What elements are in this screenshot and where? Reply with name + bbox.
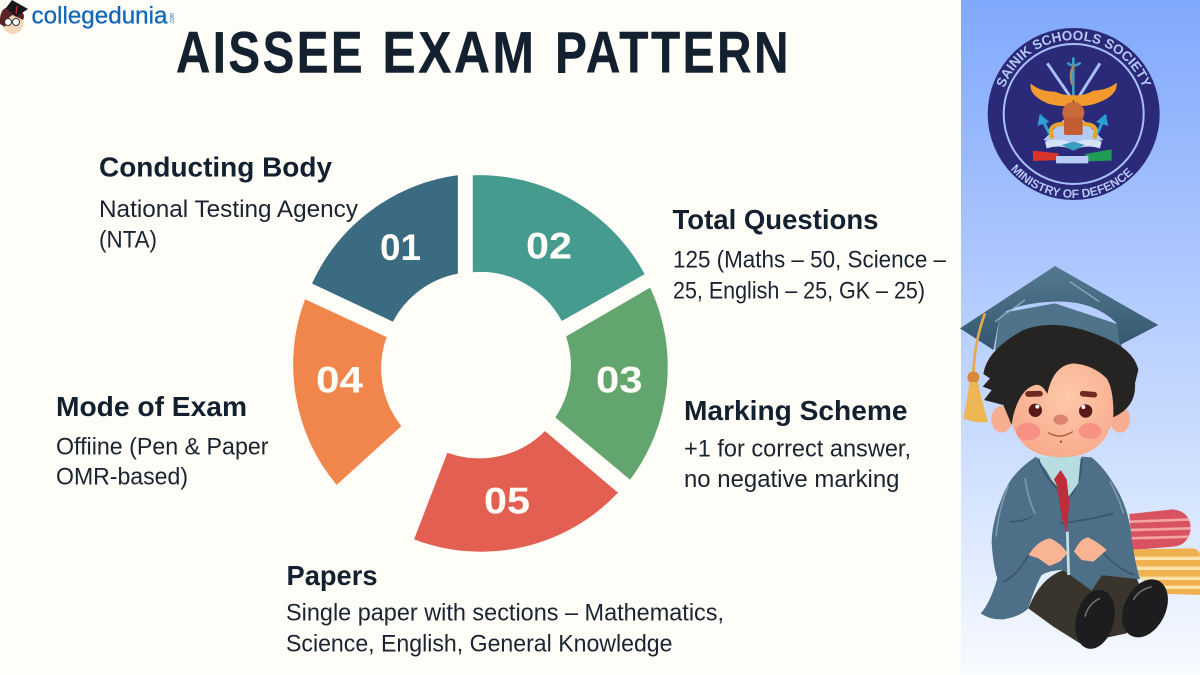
emblem: Sainik Schools Society crest (988, 28, 1160, 200)
hair (983, 325, 1138, 425)
text block: total questions: Total Questions (672, 204, 878, 235)
shoes (1069, 572, 1177, 653)
text block: marking scheme (684, 395, 911, 493)
illustration: graduate boy with books (960, 266, 1200, 653)
segment 02: 02 (526, 226, 572, 266)
eyebrows and eyes (1028, 394, 1094, 418)
text block: mode of exam (56, 391, 268, 490)
text block: marking scheme: no negative marking (684, 466, 900, 493)
text block: marking scheme: Marking Scheme (684, 395, 908, 426)
logo: collegedunia (0, 0, 176, 34)
text block: conducting body: National Testing Agency (99, 196, 358, 223)
panel: right blue gradient (961, 0, 1200, 675)
segment 05 (415, 432, 617, 551)
segment 04: 04 (316, 360, 363, 400)
segment 01 (313, 176, 457, 321)
text block: total questions: 25, English – 25, GK – 25) (673, 278, 925, 304)
crest text: bottom arc: MINISTRY OF DEFENCE (1011, 164, 1133, 198)
text block: papers: Science, English, General Knowledge (286, 630, 672, 658)
text block: mode of exam: OMR-based) (56, 464, 188, 490)
text block: total questions: 125 (Maths – 50, Science – (673, 246, 947, 274)
icon: student head with cap (0, 0, 28, 34)
ears (991, 406, 1012, 433)
face (1010, 357, 1114, 457)
text block: conducting body: Conducting Body (99, 152, 332, 182)
crest artwork: lances, anchor, eagle and lion capital (1030, 57, 1117, 163)
gown (981, 457, 1140, 619)
text block: papers: Papers (286, 560, 378, 591)
text block: papers: Single paper with sections – Mathematics, (286, 600, 724, 626)
donut chart: five numbered segments (294, 176, 667, 551)
tie (1054, 470, 1069, 532)
text block: papers (286, 560, 724, 658)
segment 05: 05 (484, 480, 530, 522)
text block: mode of exam: Mode of Exam (56, 391, 247, 422)
title: AISSEE (176, 20, 365, 86)
books (1129, 509, 1200, 595)
title: PATTERN (555, 20, 791, 86)
graduation cap (960, 266, 1158, 350)
crest text: top arc: SAINIK SCHOOLS SOCIETY (996, 30, 1152, 87)
trousers (1028, 570, 1142, 643)
segment 01: 01 (380, 227, 421, 268)
text block: conducting body: (NTA) (99, 226, 157, 254)
text block: conducting body (99, 152, 358, 254)
shirt placket (1067, 532, 1069, 575)
segment 03 (556, 288, 667, 479)
right ear (1110, 406, 1130, 433)
logo wordmark: collegedunia (32, 2, 168, 30)
segment 03: 03 (596, 360, 642, 400)
shirt collar (1038, 457, 1081, 498)
tassel (963, 313, 988, 422)
segment 02 (473, 176, 644, 320)
title (176, 20, 791, 86)
text block: total questions (672, 204, 947, 304)
text block: marking scheme: +1 for correct answer, (684, 436, 911, 462)
text block: mode of exam: Offiine (Pen & Paper (56, 434, 268, 460)
title: EXAM (382, 20, 536, 86)
cheeks, nose and mouth (1016, 415, 1101, 443)
logo suffix .com: .com (169, 13, 176, 24)
segment 04 (294, 300, 401, 484)
hands (1028, 537, 1107, 566)
